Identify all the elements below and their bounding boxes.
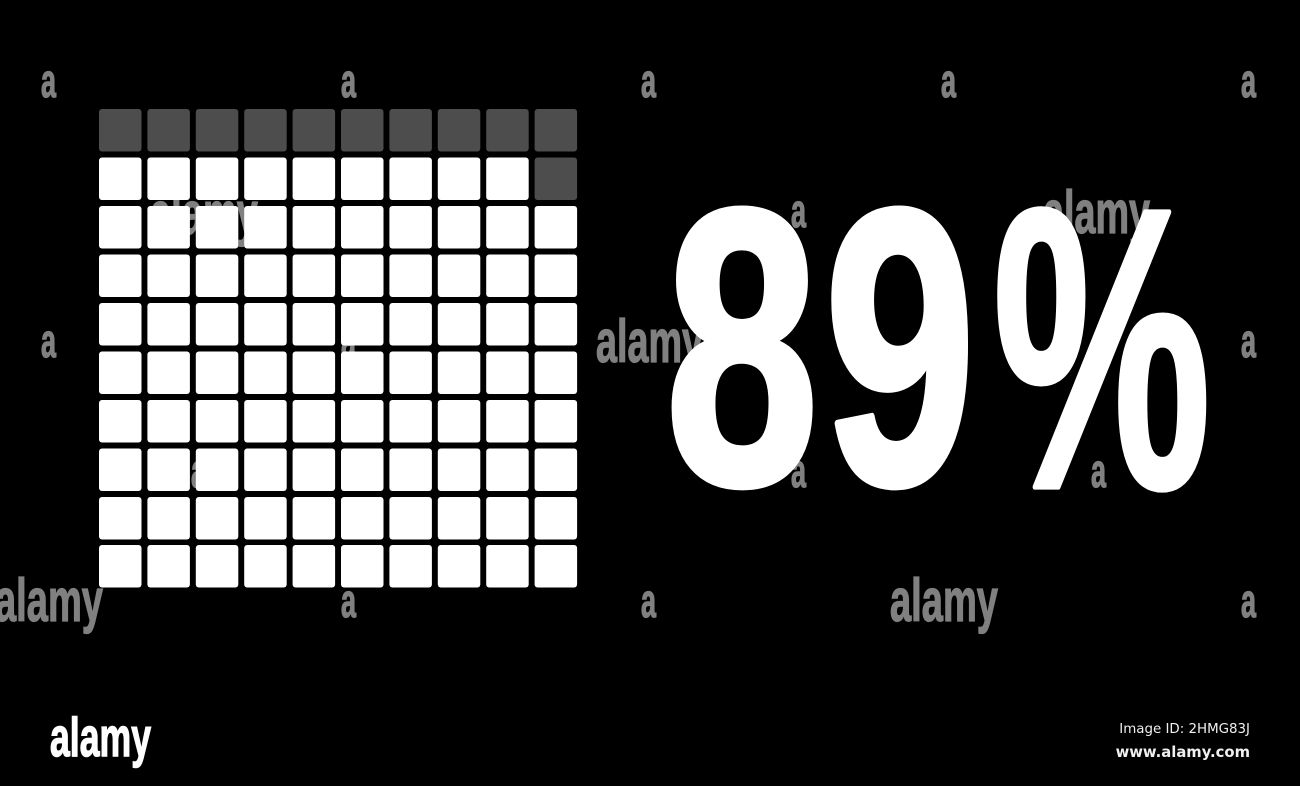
- website url: www.alamy.com: [1116, 744, 1250, 761]
- headline figure: 89%: 9: [824, 127, 976, 567]
- headline figure: 89%: %: [993, 127, 1211, 573]
- watermark: large repeated wordmarks: alamy: [890, 567, 998, 634]
- watermark: small repeated letters: a: [791, 444, 806, 497]
- watermark: small repeated letters: a: [341, 314, 356, 367]
- waffle chart: 89 of 100 squares filled: [99, 109, 577, 588]
- watermark: large repeated wordmarks: [0, 179, 1150, 634]
- watermark: large repeated wordmarks: alamy: [596, 308, 703, 375]
- watermark: small repeated letters: a: [641, 574, 656, 627]
- watermark: small repeated letters: a: [791, 184, 806, 237]
- watermark: large repeated wordmarks: alamy: [150, 180, 258, 247]
- watermark: small repeated letters: a: [41, 54, 56, 107]
- watermark: large repeated wordmarks: alamy: [1043, 179, 1150, 246]
- watermark: small repeated letters: a: [1241, 574, 1256, 627]
- watermark: large repeated wordmarks: alamy: [0, 567, 103, 634]
- row 2: nine filled, one unfilled: [99, 158, 577, 200]
- watermark: small repeated letters: a: [341, 54, 356, 107]
- watermark: small repeated letters: a: [1241, 54, 1256, 107]
- rows 3 to 10: filled: [99, 206, 577, 588]
- image id: Image ID: 2HMG83J: [1119, 722, 1250, 737]
- watermark: small repeated letters: a: [641, 54, 656, 107]
- watermark: small repeated letters: [41, 54, 1256, 627]
- watermark: small repeated letters: a: [1241, 314, 1256, 367]
- watermark: small repeated letters: a: [1091, 444, 1106, 497]
- watermark: small repeated letters: a: [191, 444, 206, 497]
- row 1: unfilled: [99, 109, 577, 152]
- watermark: small repeated letters: a: [341, 574, 356, 627]
- headline figure: 89%: 8: [665, 128, 819, 566]
- watermark: small repeated letters: a: [41, 314, 56, 367]
- logo: alamy: alamy: [50, 706, 151, 768]
- watermark: small repeated letters: a: [941, 54, 956, 107]
- headline figure: 89%: [665, 127, 1211, 573]
